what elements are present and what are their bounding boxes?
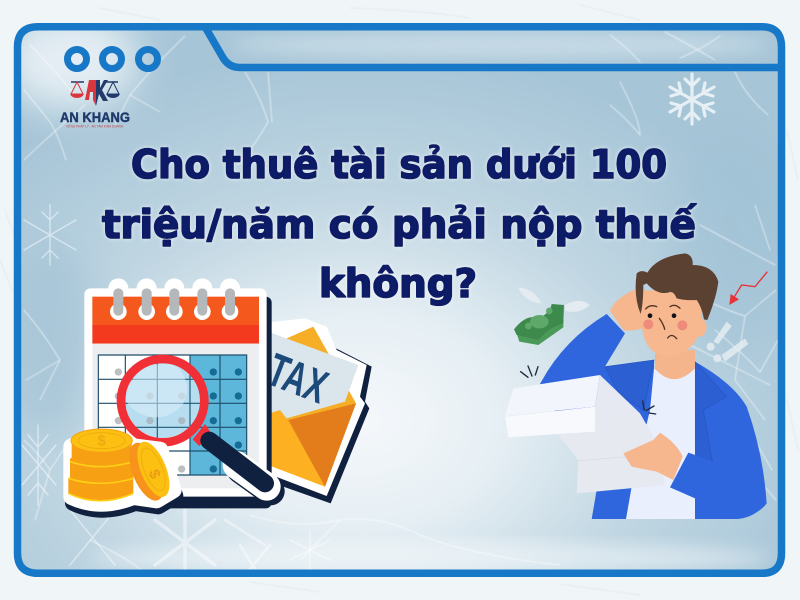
icon: flying money [514, 287, 590, 345]
three circle dots [68, 50, 158, 68]
man: sleeve [670, 453, 767, 517]
emphasis marks [521, 366, 656, 414]
snowflake: top right [670, 74, 714, 124]
man: face [642, 290, 701, 356]
title [102, 143, 697, 307]
man: ear [692, 318, 707, 337]
man: facial features [643, 305, 687, 339]
man: neck [655, 350, 695, 379]
man: lapels [605, 360, 727, 467]
papers [505, 375, 665, 493]
title: Cho thuê tài sản dưới 100 [131, 143, 667, 188]
leaning coin: $ [145, 467, 164, 482]
man: raised hand [610, 289, 645, 330]
tax label: TAX [261, 343, 335, 413]
snowflake: lower left [22, 425, 56, 505]
title: không? [319, 262, 477, 307]
calendar rings [108, 278, 240, 320]
coin stack: $ [98, 434, 106, 450]
man: jacket body [540, 314, 767, 519]
snowflake: left [24, 205, 76, 265]
man: holding hand [623, 433, 683, 480]
calendar grid [98, 355, 247, 475]
snowflakes: bottom row [70, 510, 330, 569]
coins outline [72, 440, 173, 503]
icon: exclamation marks [707, 322, 748, 362]
illustration: calendar, tax envelope, magnifier and coins [68, 278, 372, 509]
logo name: AN KHANG [60, 110, 130, 125]
title: triệu/năm có phải nộp thuế [102, 203, 697, 248]
logo: An Khang [60, 50, 158, 128]
icon: calendar [84, 278, 272, 508]
man: hair [636, 253, 718, 320]
logo tagline: VỮNG PHÁP LÝ - AN TÂM KINH DOANH [66, 124, 123, 128]
icon: red down arrow [729, 272, 767, 305]
icon: tax envelope [258, 318, 372, 503]
logo emblem [70, 80, 120, 106]
man: shirt [626, 368, 695, 519]
icon: magnifier [121, 355, 271, 491]
coins shadow [73, 446, 175, 509]
illustration: worried man with papers [505, 253, 767, 519]
icon: coins [68, 429, 176, 509]
